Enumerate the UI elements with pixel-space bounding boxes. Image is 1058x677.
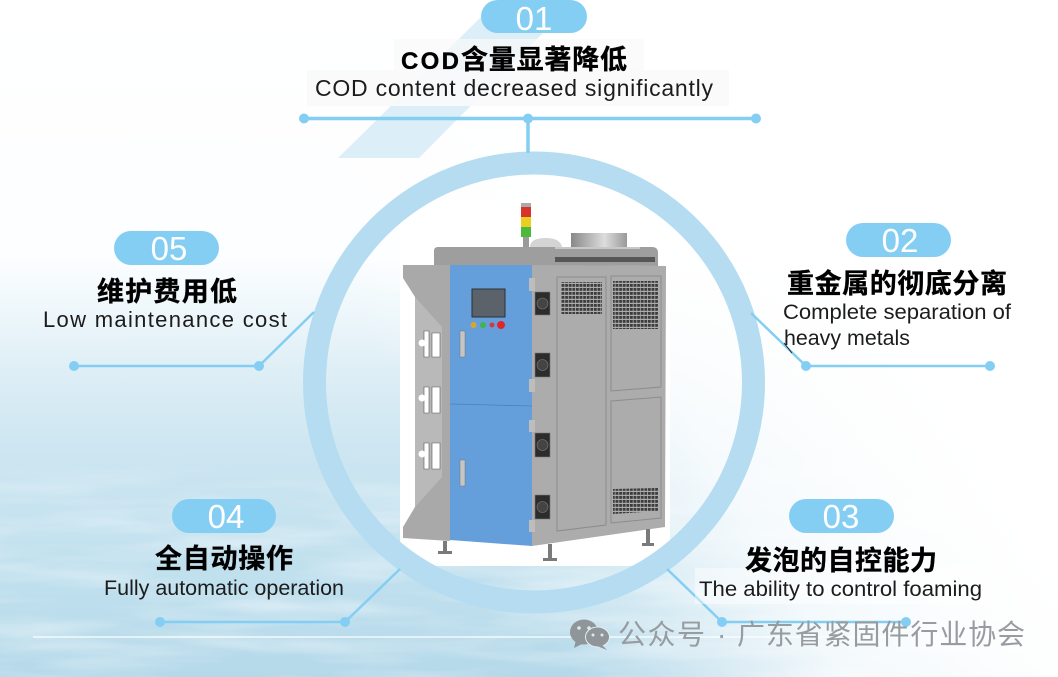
door handles	[460, 331, 465, 486]
heading 04: 全自动操作	[155, 544, 293, 574]
block 03	[695, 498, 997, 604]
left side frame	[403, 265, 450, 541]
diagonal light band behind heading 01	[338, 17, 543, 158]
badge 01	[481, 0, 587, 37]
touchscreen	[472, 289, 505, 317]
watermark	[570, 619, 1025, 650]
central ring	[314, 163, 754, 602]
connector 04	[155, 569, 400, 627]
badge 05	[114, 230, 219, 267]
icon: wechat	[570, 620, 610, 650]
block 05	[43, 230, 287, 332]
heading 03: 发泡的自控能力	[745, 546, 937, 576]
subtext 01: COD content decreased significantly	[315, 75, 714, 101]
fans	[535, 292, 550, 519]
subtext 01	[307, 70, 729, 106]
badge 03	[789, 498, 894, 535]
subtext 05: Low maintenance cost	[43, 307, 287, 332]
blue doors	[450, 265, 532, 546]
subtext 03	[695, 568, 997, 604]
badge 05: 05	[151, 230, 187, 267]
watermark text: 公众号	[618, 619, 705, 650]
badge 01: 01	[516, 0, 552, 37]
connector 02	[751, 313, 995, 371]
connector lines	[69, 114, 995, 627]
heading 02: 重金属的彻底分离	[787, 269, 1007, 299]
watermark text: ·	[717, 619, 726, 650]
subtext 03: The ability to control foaming	[699, 578, 982, 601]
machine photo backdrop	[400, 200, 670, 566]
heading 01	[394, 39, 644, 75]
machine illustration	[403, 203, 666, 561]
badge 02	[846, 222, 951, 259]
block 04	[104, 498, 344, 600]
subtext 02: heavy metals	[784, 327, 910, 350]
background: water	[0, 277, 934, 677]
badge 02: 02	[882, 222, 918, 259]
connector 05	[69, 312, 314, 371]
badge 04: 04	[208, 498, 244, 535]
top cover and duct	[434, 233, 658, 266]
side valves	[418, 331, 440, 469]
heading 01: 含量显著降低	[461, 45, 627, 75]
heading 01: COD	[401, 48, 459, 75]
block 01	[307, 0, 729, 106]
heading 05: 维护费用低	[97, 277, 237, 307]
watermark text: 广东省紧固件行业协会	[737, 619, 1025, 650]
feet	[438, 529, 654, 561]
connector 03	[667, 569, 911, 627]
connector 01	[299, 114, 761, 153]
buttons	[470, 321, 505, 329]
badge 04	[172, 498, 276, 535]
badge 03: 03	[823, 498, 859, 535]
right grey body	[532, 265, 666, 546]
subtext 04: Fully automatic operation	[104, 577, 344, 600]
block 02	[783, 222, 1011, 353]
hinges	[529, 278, 535, 532]
vent grilles	[561, 281, 658, 514]
subtext 02	[783, 301, 1011, 353]
signal tower	[521, 203, 531, 267]
subtext 02: Complete separation of	[783, 301, 1011, 324]
